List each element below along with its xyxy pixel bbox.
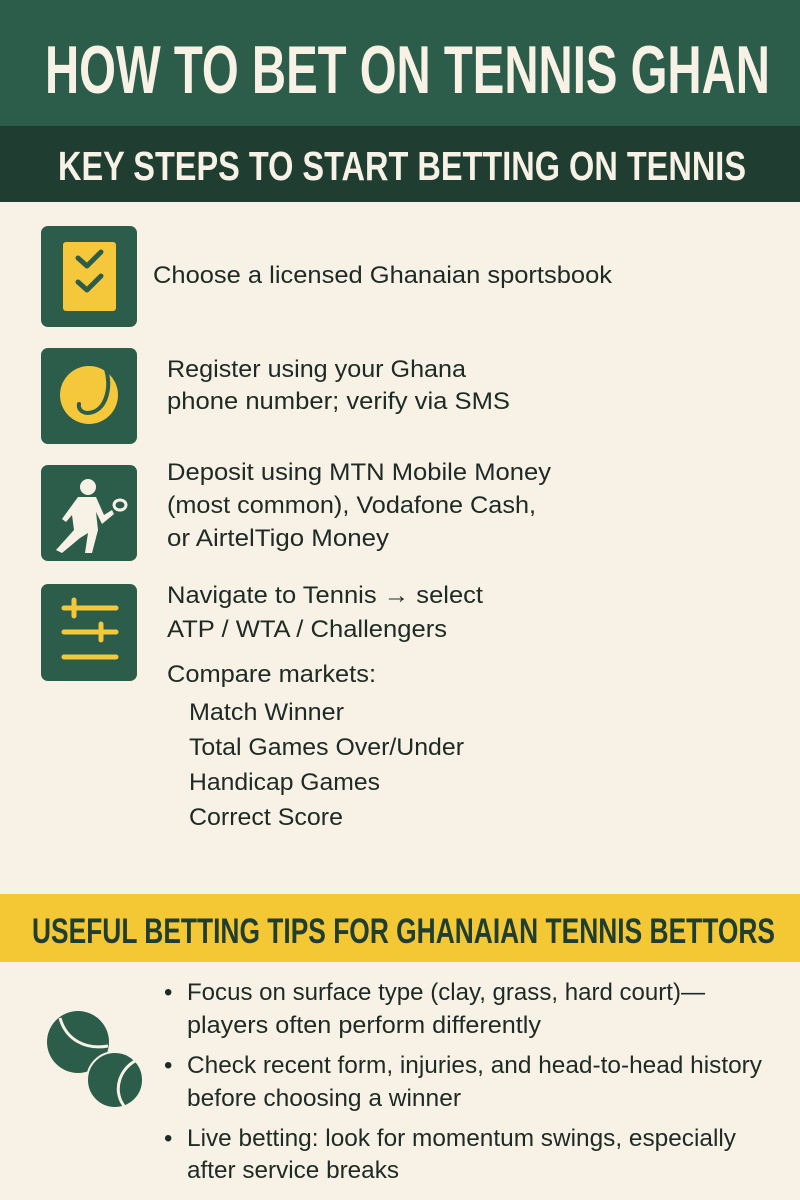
- step 3 text: (most common), Vodafone Cash,: [167, 492, 536, 519]
- subtitle banner: [0, 126, 800, 202]
- step 3 text: or AirtelTigo Money: [167, 525, 389, 552]
- icon: tennis ball: [41, 348, 137, 444]
- step 3 text: [167, 459, 551, 552]
- step 4 text: [167, 582, 483, 643]
- icon: tennis player: [41, 465, 137, 561]
- tips banner: [0, 894, 800, 962]
- step 2 text: phone number; verify via SMS: [167, 388, 510, 415]
- tips list: before choosing a winner: [187, 1085, 461, 1112]
- icon: tennis balls: [47, 1011, 143, 1108]
- tips list: •: [164, 1052, 172, 1079]
- step 3 text: Deposit using MTN Mobile Money: [167, 459, 551, 486]
- markets list: Compare markets:: [167, 661, 376, 688]
- tips list: •: [164, 979, 172, 1006]
- markets list: [167, 661, 464, 831]
- tips list: •: [164, 1125, 172, 1152]
- markets list: Handicap Games: [189, 769, 380, 796]
- tips list: players often perform differently: [187, 1012, 541, 1039]
- step 1 text: Choose a licensed Ghanaian sportsbook: [153, 262, 613, 289]
- step 4 text: Navigate to Tennis → select: [167, 582, 483, 609]
- tips list: Live betting: look for momentum swings, especially: [187, 1125, 736, 1152]
- icon: sliders: [41, 584, 137, 681]
- markets list: Total Games Over/Under: [189, 734, 464, 761]
- tips list: Focus on surface type (clay, grass, hard court)—: [187, 979, 705, 1006]
- step 2 text: [167, 356, 510, 415]
- title banner: [0, 0, 800, 126]
- step 4 text: ATP / WTA / Challengers: [167, 616, 447, 643]
- markets list: Match Winner: [189, 699, 344, 726]
- tips list: [164, 979, 762, 1184]
- step 2 text: Register using your Ghana: [167, 356, 467, 383]
- tips list: after service breaks: [187, 1157, 399, 1184]
- tips list: Check recent form, injuries, and head-to-head history: [187, 1052, 762, 1079]
- markets list: Correct Score: [189, 804, 343, 831]
- icon: checklist: [41, 226, 137, 327]
